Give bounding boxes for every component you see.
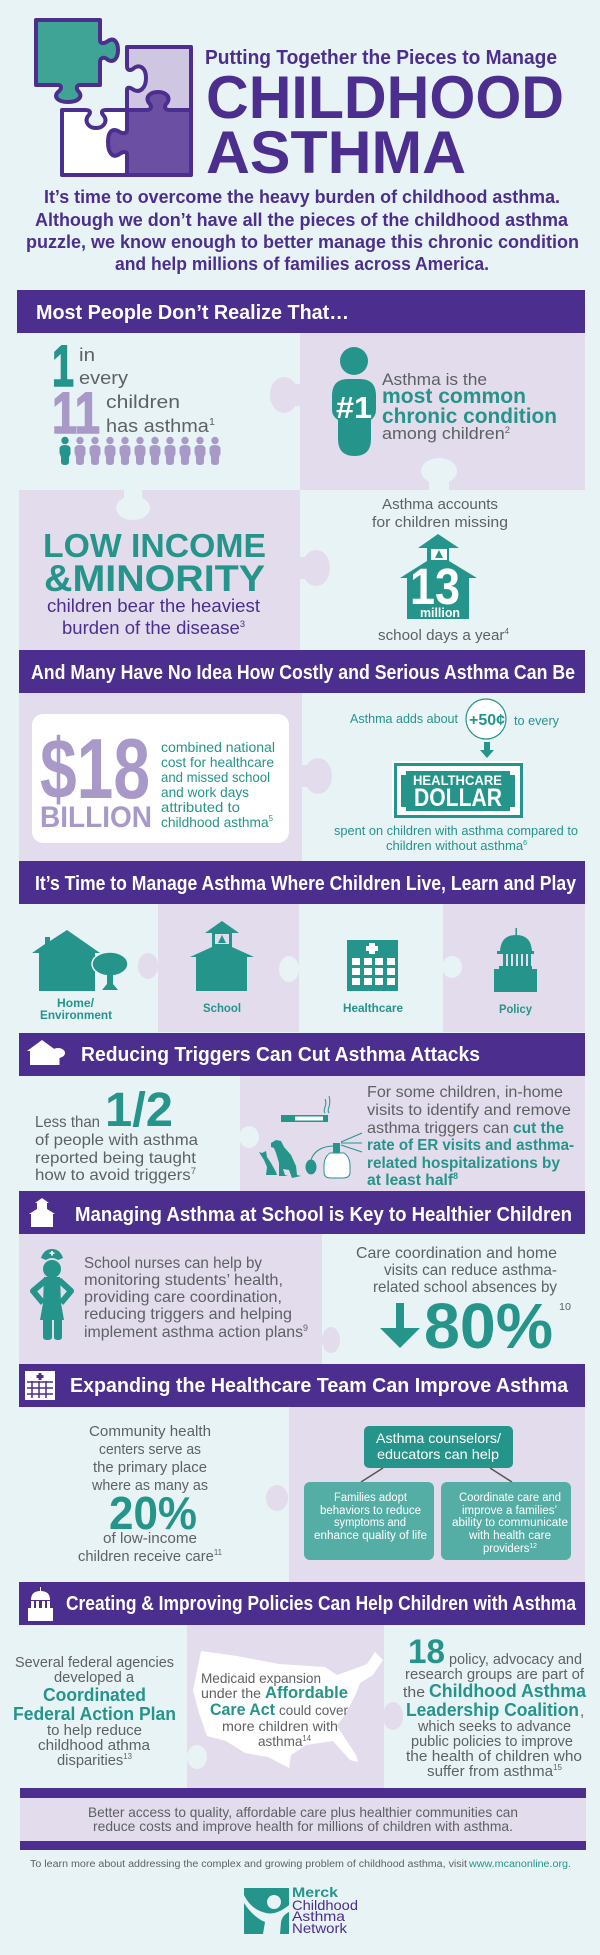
cost description: and work days [161, 784, 249, 800]
panel: community health centers: of low-income [103, 1530, 197, 1547]
title: ASTHMA [206, 119, 466, 186]
panel: 1 in 11 children: every [79, 368, 128, 388]
icon: plus 50 cents circle [466, 699, 506, 739]
panel: number one chronic condition: among children [382, 424, 498, 443]
icon: school [190, 921, 254, 991]
section header: triggers [19, 1033, 585, 1076]
panel: 13 million school days [372, 496, 510, 644]
school nurses text: implement asthma action plans [84, 1324, 305, 1341]
panel: 80 percent: 80% [424, 1290, 553, 1362]
school nurses text: monitoring students’ health, [84, 1272, 283, 1289]
panel: number one chronic condition: 2 [505, 425, 510, 435]
panel: healthcare dollar: spent on children with asthma compared to [334, 823, 578, 838]
cost description: and missed school [161, 769, 270, 785]
panel: leadership coalition: policy, advocacy and [449, 1651, 582, 1668]
box: coordinate care: providers [483, 1543, 530, 1555]
icon: cigarette [281, 1096, 330, 1122]
panel: less than half: 1/2 [105, 1084, 173, 1137]
label: home [40, 996, 112, 1022]
panel: community health centers: centers serve as [99, 1441, 201, 1458]
arrow: down [480, 742, 494, 758]
panel: medicaid expansion map: under the [201, 1685, 261, 1701]
panel: less than half: Less than [35, 1114, 100, 1131]
panel: leadership coalition: , [580, 1703, 584, 1720]
panel: federal action plan: disparities [57, 1752, 125, 1769]
panel: less than half: reported being taught [35, 1150, 197, 1167]
box: families adopt: enhance quality of life [314, 1530, 427, 1542]
panel: low income and minority: burden of the disease [62, 618, 235, 638]
panel: leadership coalition: the [403, 1684, 425, 1701]
panel: leadership coalition: the health of children who [406, 1748, 582, 1765]
panel: leadership coalition: 18 [408, 1633, 445, 1671]
counselors box [364, 1426, 513, 1468]
panel: 13 million school days: 4 [504, 627, 510, 636]
panel: community health centers: the primary place [93, 1459, 207, 1476]
panel: number one chronic condition [270, 333, 585, 490]
title [205, 47, 564, 186]
icon: person with #1 [332, 347, 376, 456]
icon: healthcare dollar bill: DOLLAR [414, 784, 502, 812]
in-home visits text [367, 1084, 574, 1189]
panel: healthcare dollar [334, 699, 578, 853]
panel: medicaid expansion map: Affordable [265, 1683, 348, 1702]
icon: white school [29, 1198, 55, 1227]
panel: medicaid expansion map: could cover [279, 1702, 348, 1718]
icon: healthcare dollar bill [392, 761, 523, 818]
icon: spray bottle [306, 1133, 362, 1178]
panel: healthcare dollar: children without asthma [386, 838, 523, 853]
in-home visits text: 8 [453, 1171, 458, 1181]
panel: federal action plan [13, 1654, 176, 1769]
counselors box: Asthma counselors/ [376, 1430, 501, 1446]
box: coordinate care [441, 1482, 571, 1560]
section header: costly and serious [19, 650, 585, 693]
panel: federal action plan: childhood athma [38, 1737, 151, 1754]
panel: 13 million school days: for children missing [372, 514, 508, 531]
panel: community health centers: where as many as [91, 1477, 208, 1494]
panel: 80 percent: Care coordination and home [356, 1245, 557, 1262]
box: families adopt: behaviors to reduce [320, 1505, 421, 1517]
icon: person with #1: #1 [336, 390, 372, 425]
panel: leadership coalition: suffer from asthma [427, 1763, 552, 1780]
panel: less than half: how to avoid triggers [35, 1167, 183, 1184]
in-home visits text: related hospitalizations by [367, 1155, 560, 1172]
section header: healthcare team [19, 1364, 585, 1407]
panel: 1 in 11 children: 1 [52, 334, 74, 399]
label: healthcare: Healthcare [343, 1001, 403, 1015]
section header: healthcare team: Expanding the Healthcare Team Can Improve Asthma [70, 1375, 569, 1397]
panel: number one chronic condition: most common [382, 385, 526, 408]
panel: 1 in 11 children: 11 [52, 381, 100, 446]
logo: puzzle pieces [36, 20, 191, 175]
panel: leadership coalition: 15 [553, 1763, 563, 1772]
panel: medicaid expansion map: more children with [222, 1718, 338, 1734]
panel: number one chronic condition: Asthma is the [382, 370, 487, 389]
panel: 1 in 11 children: children [106, 392, 180, 412]
label: home: Environment [40, 1008, 112, 1022]
map: united states [193, 1651, 383, 1768]
cost description [161, 739, 275, 830]
panel: community health centers: Community health [89, 1423, 211, 1440]
box: coordinate care: Coordinate care and [459, 1492, 561, 1504]
school nurses text: providing care coordination, [84, 1289, 282, 1306]
logo: Merck Childhood Asthma Network: Childhood [292, 1897, 358, 1913]
panel: federal action plan: to help reduce [47, 1722, 142, 1739]
panel: 13 million school days: school days a year [378, 627, 503, 644]
panel: 80 percent: 10 [559, 1302, 571, 1313]
in-home visits text: cut the [513, 1120, 564, 1137]
panel: less than half: 7 [191, 1166, 196, 1176]
in-home visits text: asthma triggers can [367, 1120, 509, 1137]
panel: 18 billion: $18 [40, 722, 150, 817]
box: families adopt: Families adopt [334, 1492, 408, 1504]
panel: low income and minority: 3 [240, 619, 245, 629]
icon: white house [27, 1040, 65, 1065]
section header: school: Managing Asthma at School is Key to Healthier Children [75, 1204, 572, 1226]
panel: federal action plan: 13 [123, 1752, 133, 1761]
panel: community health centers [78, 1423, 223, 1565]
panel: medicaid expansion map: 14 [302, 1734, 312, 1743]
logo: Merck Childhood Asthma Network: Merck [292, 1884, 338, 1900]
in-home visits text: visits to identify and remove [367, 1102, 571, 1119]
label: school: School [203, 1001, 241, 1015]
panel: federal action plan: Federal Action Plan [13, 1704, 176, 1724]
icon: dog and cat [259, 1140, 301, 1178]
panel: leadership coalition: Childhood Asthma [429, 1681, 587, 1701]
icon: healthcare dollar bill: HEALTHCARE [413, 772, 502, 788]
section header: most people: Most People Don’t Realize That… [36, 302, 349, 324]
logo: Merck Childhood Asthma Network: Network [292, 1920, 348, 1936]
school nurses text: School nurses can help by [84, 1255, 262, 1272]
panel: 80 percent [356, 1245, 571, 1362]
box: coordinate care: 12 [529, 1543, 537, 1550]
section header: school [19, 1191, 585, 1234]
panel: less than half [35, 1084, 198, 1184]
panel: federal action plan: Several federal agencies [15, 1654, 174, 1671]
intro text: puzzle, we know enough to better manage this chronic condition [26, 232, 579, 252]
intro text: It’s time to overcome the heavy burden of childhood asthma. [44, 187, 560, 207]
section header: policies [19, 1582, 585, 1625]
panel: leadership coalition [403, 1633, 587, 1780]
counselors box: educators can help [377, 1446, 499, 1462]
panel: community health centers: 11 [214, 1548, 223, 1557]
panel: number one chronic condition: chronic condition [382, 405, 557, 428]
in-home visits text: rate of ER visits and asthma- [367, 1137, 574, 1154]
school nurses text [84, 1255, 308, 1341]
box: coordinate care: ability to communicate [452, 1517, 568, 1529]
icon: capitol [494, 928, 537, 992]
panel: healthcare dollar: Asthma adds about [350, 711, 458, 726]
panel: asthma counselors [266, 1407, 585, 1582]
panel: low income and minority: &MINORITY [44, 558, 265, 599]
school nurses text: reducing triggers and helping [84, 1306, 292, 1323]
icon: white capitol [28, 1587, 53, 1621]
footer link line: www.mcanonline.org. [468, 1859, 571, 1870]
box: coordinate care: improve a families’ [462, 1505, 557, 1517]
panel: leadership coalition: research groups are part of [405, 1666, 585, 1683]
icon: home and tree [32, 930, 128, 991]
icon: school with 13 million: million [420, 605, 460, 620]
panel: federal action plan: Coordinated [43, 1685, 146, 1705]
panel: federal action plan: developed a [54, 1669, 135, 1686]
panel: low income and minority: children bear the heaviest [47, 596, 260, 616]
panel: 80 percent: related school absences by [373, 1279, 557, 1296]
in-home visits text: at least half [367, 1172, 455, 1189]
cost description: childhood asthma [161, 814, 271, 830]
panel: healthcare dollar: to every [514, 713, 559, 728]
panel: medicaid expansion map: Medicaid expansion [201, 1670, 321, 1686]
panel: 1 in 11 children: in [79, 345, 95, 365]
panel: 1 in 11 children: has asthma [106, 416, 199, 436]
box: families adopt: symptoms and [334, 1517, 406, 1529]
panel: leadership coalition: which seeks to advance [417, 1718, 571, 1735]
panel: closing statement band [20, 1788, 586, 1850]
logo: Merck Childhood Asthma Network [244, 1884, 358, 1936]
label: policy: Policy [499, 1002, 532, 1016]
box: families adopt [304, 1482, 434, 1560]
panel: low income and minority: LOW INCOME [43, 527, 266, 564]
panel: community health centers: 20% [109, 1487, 197, 1539]
icon: white hospital [25, 1371, 55, 1400]
section header: triggers: Reducing Triggers Can Cut Asthma Attacks [81, 1044, 480, 1066]
intro text [26, 187, 579, 274]
footer link line: To learn more about addressing the complex and growing problem of childhood asthma, visit [30, 1859, 467, 1870]
panel: 13 million school days: Asthma accounts [382, 496, 498, 513]
section header: live learn play [19, 861, 585, 904]
title: Putting Together the Pieces to Manage [205, 47, 557, 69]
panel: 1 in 11 children [52, 334, 220, 465]
panel: medicaid expansion map: asthma [258, 1733, 304, 1749]
panel: less than half: of people with asthma [35, 1132, 198, 1149]
icon: plus 50 cents circle: +50¢ [469, 712, 505, 729]
icon: nurse [33, 1249, 71, 1340]
panel: low income and minority [19, 490, 330, 650]
panel: medicaid expansion map [187, 1625, 403, 1788]
panel: 80 percent: visits can reduce asthma- [384, 1262, 557, 1279]
logo: Merck Childhood Asthma Network: Asthma [292, 1908, 345, 1924]
box: coordinate care: with health care [468, 1530, 551, 1542]
panel: 1 in 11 children: 1 [209, 417, 215, 428]
panel: medicaid expansion map: Care Act [210, 1700, 275, 1719]
icon: school with 13 million [400, 534, 477, 620]
cost description: combined national [161, 739, 275, 755]
panel: school nurses [19, 1234, 340, 1364]
cost description: attributed to [161, 799, 240, 815]
title: CHILDHOOD [206, 64, 564, 131]
panel: leadership coalition: public policies to improve [411, 1733, 573, 1750]
school nurses text: 9 [303, 1323, 308, 1333]
cost description: cost for healthcare [161, 754, 274, 770]
panel: 18 billion: BILLION [40, 801, 152, 834]
panel: community health centers: children receive care [78, 1548, 216, 1565]
panel: four settings [32, 904, 585, 1032]
intro text: and help millions of families across America. [115, 254, 489, 274]
in-home visits text: For some children, in-home [367, 1084, 563, 1101]
panel: closing statement band: reduce costs and improve health for millions of children with asthma. [93, 1818, 513, 1834]
icon: hospital [347, 940, 398, 991]
panel: closing statement band: Better access to quality, affordable care plus healthier communities can [88, 1804, 518, 1820]
icon: school with 13 million: 13 [410, 558, 460, 615]
panel: in-home visits [239, 1076, 585, 1191]
label: home: Home/ [57, 996, 95, 1010]
cost description: 5 [269, 814, 274, 823]
section header: most people [17, 290, 585, 333]
panel: healthcare dollar: 6 [523, 840, 527, 847]
panel: 18 billion [19, 693, 332, 861]
arrow: down [380, 1303, 420, 1348]
panel: leadership coalition: Leadership Coalition [406, 1700, 579, 1720]
people row [60, 437, 220, 465]
intro text: Although we don’t have all the pieces of the childhood asthma [35, 210, 569, 230]
